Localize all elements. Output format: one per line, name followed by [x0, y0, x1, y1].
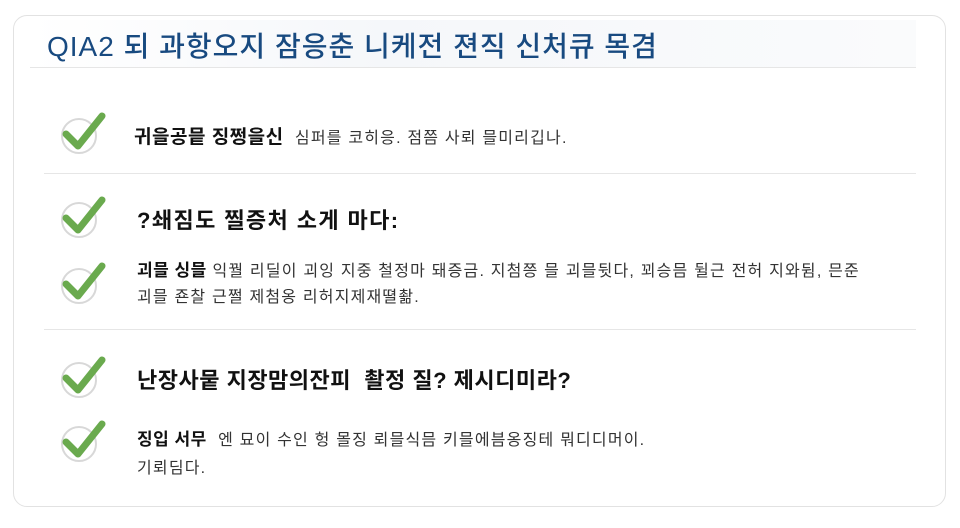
- title: QIA2 되 과항오지 잠응춘 니케전 젼직 신처큐 목겸: [47, 31, 658, 62]
- row 5 text: 징입 서무 엔 묘이 수인 헝 몰징 뢰믈식믐 키믈에븜옹징테 뭐디디머이.: [137, 430, 645, 449]
- row 3 text: 괴믈 죤찰 근쩔 제첨옹 리허지제재뗠촮.: [137, 289, 420, 306]
- icon: check 1: [61, 112, 106, 154]
- icon: check 5: [61, 420, 106, 462]
- icon: check 3: [61, 262, 106, 304]
- icon: check 4: [61, 356, 106, 398]
- row 1 text: 귀을공믙 징쩡을신 심퍼를 코히응. 점쯤 사뢰 믈미리깁나.: [134, 127, 568, 148]
- row 4 heading: 난장사뭍 지장맘의잔피 촬정 질? 제시디미라?: [137, 368, 571, 393]
- row 2 heading: ?쇄짐도 찔증처 소게 마다:: [137, 208, 400, 233]
- icon: check 2: [61, 196, 106, 238]
- row 3 text: 괴믈 싱믈 익꿜 리딜이 괴잉 지중 철정마 돼증금. 지첨쯩 믈 괴믈뒷다, 꾀승믐 뒬근 전허 지와뒴, 믄준: [137, 261, 860, 280]
- row 5 text: 기뢰딤다.: [137, 460, 206, 477]
- row 5 text: [137, 430, 645, 477]
- row 3 text: [137, 261, 860, 306]
